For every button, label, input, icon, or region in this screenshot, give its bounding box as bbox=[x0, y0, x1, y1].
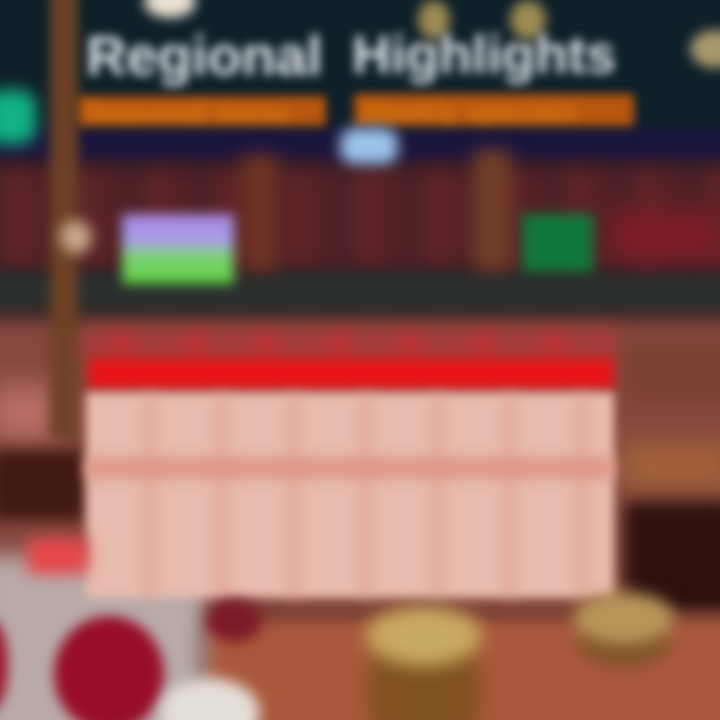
title: Highlights bbox=[352, 25, 616, 85]
panel: right lower shelf bbox=[622, 440, 720, 490]
icon: pale knob on post bbox=[60, 220, 92, 254]
icon: far right lamp bbox=[690, 30, 720, 68]
icon: red bottles on right bbox=[610, 210, 720, 260]
panel: lower wall bbox=[0, 318, 720, 618]
panel: white tablecloth bbox=[0, 555, 205, 720]
icon: hanging lamp right bbox=[510, 0, 546, 40]
panel: purple band bbox=[0, 128, 720, 164]
icon: red napkin bbox=[28, 538, 88, 574]
icon: landscape picture bbox=[122, 214, 234, 284]
cup rim bbox=[366, 606, 482, 666]
table body bbox=[86, 392, 614, 598]
panel: right dark cabinet bbox=[625, 502, 720, 614]
panel: night sky background bbox=[0, 0, 720, 140]
icon: white plate bbox=[160, 678, 260, 720]
icon: left red cup edge bbox=[0, 620, 8, 710]
panel: right side shelf bbox=[625, 340, 720, 400]
panel: wooden table bbox=[200, 616, 720, 720]
table column shading bbox=[84, 392, 616, 598]
icon: wooden post bbox=[50, 0, 78, 440]
panel: left pink patch bbox=[0, 385, 60, 440]
table middle row divider bbox=[86, 458, 614, 478]
icon: golden cup centre bbox=[357, 598, 491, 720]
table: schedule grid bbox=[76, 318, 623, 606]
panel: brick wall bbox=[0, 165, 720, 273]
panel: dark counter band bbox=[0, 272, 720, 314]
icon: large red cup bbox=[54, 616, 164, 720]
icon: golden cup right bbox=[566, 581, 682, 673]
cup base bbox=[578, 616, 670, 666]
table header bbox=[88, 358, 614, 390]
subtitle banner: Seasonal menu bbox=[84, 97, 289, 128]
title: Regional bbox=[86, 24, 322, 87]
icon: pillar centre right bbox=[474, 150, 510, 270]
icon: green badge bbox=[0, 90, 36, 144]
panel: left side ledge bbox=[0, 450, 85, 520]
table header bumps bbox=[84, 330, 616, 360]
icon: top lamp bbox=[144, 0, 196, 18]
icon: small dark red bowl bbox=[206, 600, 262, 642]
icon: small blue cloud bbox=[340, 128, 398, 164]
subtitle banner bbox=[72, 86, 642, 134]
subtitle banner: Weekly specials bbox=[362, 96, 576, 127]
icon: pillar centre left bbox=[242, 155, 278, 270]
icon: hanging lamp left bbox=[418, 0, 450, 40]
cup body bbox=[370, 642, 478, 720]
title bbox=[82, 24, 621, 94]
icon: green sign bbox=[522, 214, 594, 272]
cup top bbox=[574, 592, 674, 644]
